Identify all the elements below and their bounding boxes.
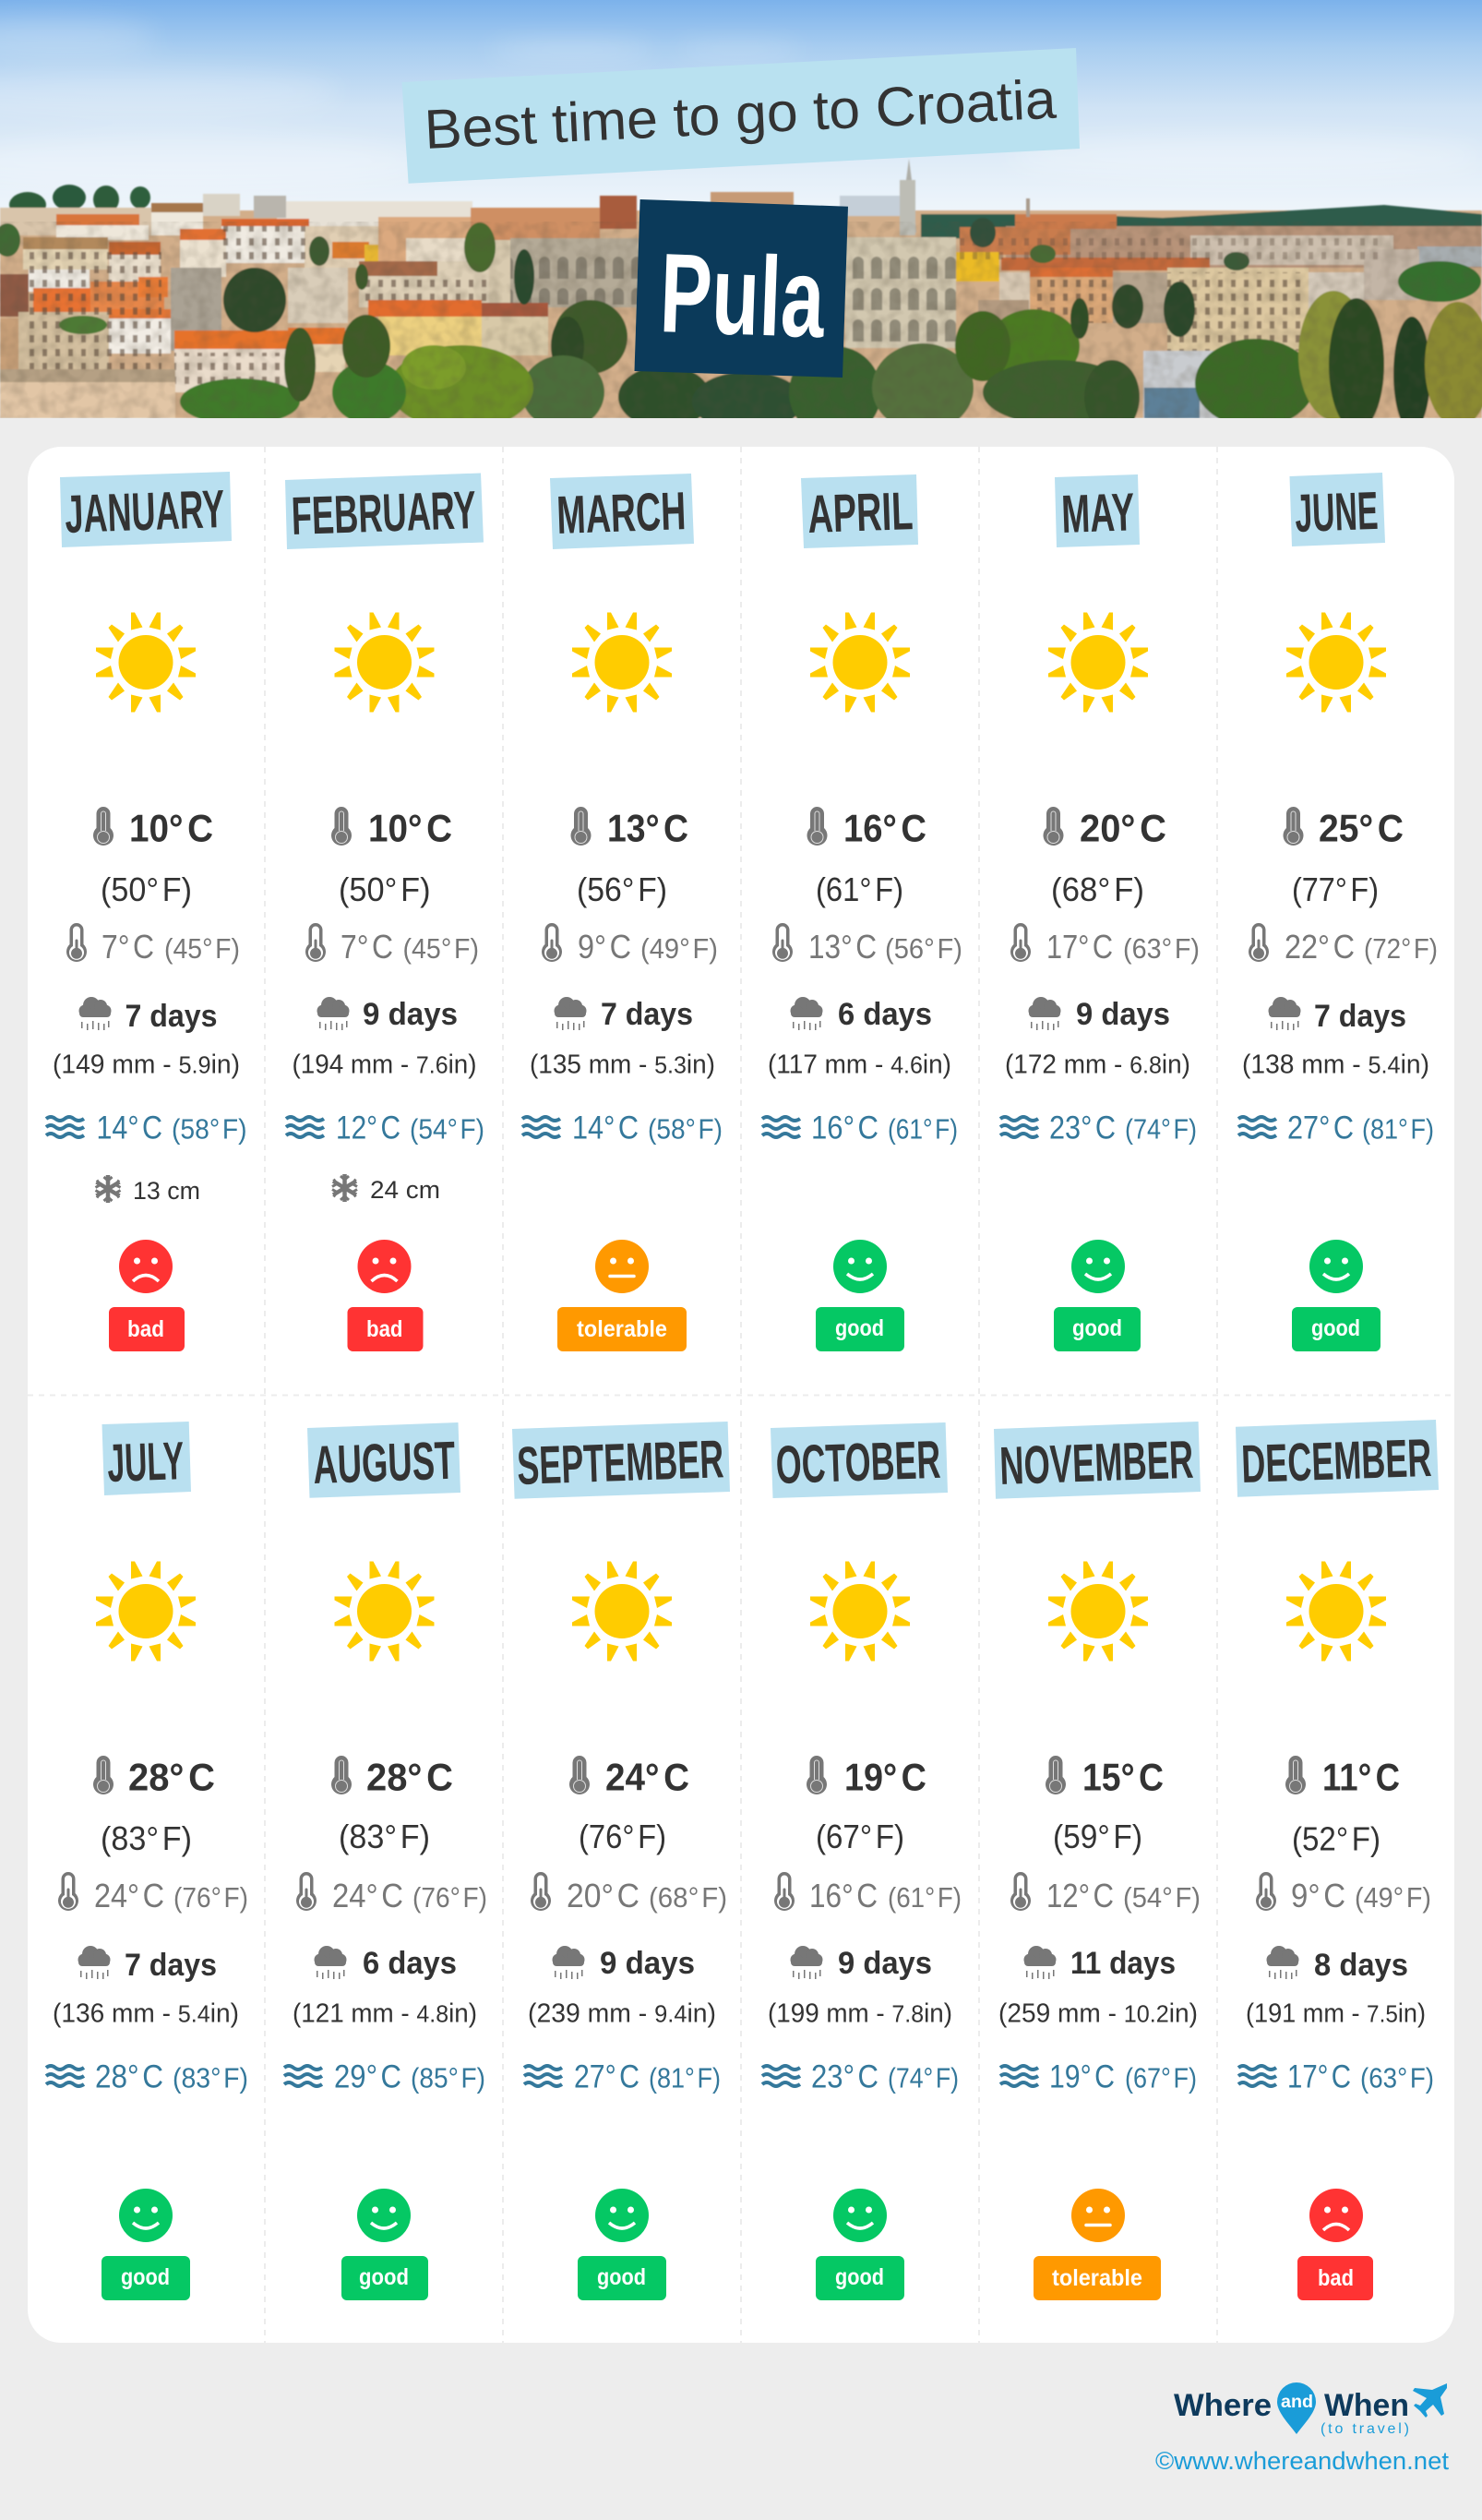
- rainy days: 11 days: [1070, 1946, 1176, 1981]
- logo: Where and When (to travel): Where: [1174, 2388, 1272, 2423]
- sea temperature: [1000, 2058, 1197, 2095]
- average temperature: 16°C: [843, 807, 926, 849]
- icon: sun: [1048, 1562, 1148, 1662]
- column: January: [46, 472, 247, 1351]
- month label: April: [801, 474, 918, 548]
- average temperature in Fahrenheit: (76°F): [579, 1818, 666, 1855]
- column: May: [1000, 474, 1200, 1351]
- rainfall: (149 mm - 5.9in): [53, 1050, 240, 1080]
- low temperature: (68°F): [649, 1881, 727, 1914]
- low temperature: (61°F): [888, 1881, 962, 1914]
- month label: July: JULY: [106, 1431, 185, 1494]
- rating face: bad: [1309, 2189, 1363, 2242]
- low temperature: 16°C: [809, 1877, 878, 1914]
- sea temperature: (67°F): [1125, 2062, 1197, 2094]
- average temperature in Fahrenheit: (52°F): [1292, 1820, 1380, 1857]
- rainfall: (135 mm - 5.3in): [530, 1050, 715, 1080]
- rating badge: good: good: [1311, 1315, 1360, 1341]
- rainy days: [554, 997, 693, 1032]
- sea temperature: (58°F): [648, 1113, 723, 1145]
- rainfall: (199 mm - 7.8in): [768, 1999, 952, 2029]
- rainy days: [78, 1946, 217, 1983]
- rainy days: 9 days: [363, 997, 458, 1032]
- rating badge: good: good: [835, 2264, 884, 2290]
- sea temperature: 27°C: [1287, 1110, 1354, 1146]
- rating badge: good: [1292, 1307, 1380, 1351]
- low temperature: [542, 923, 718, 966]
- column: November: [994, 1422, 1201, 2300]
- sea temperature: 14°C: [572, 1110, 639, 1146]
- rating face: good: [1071, 1240, 1125, 1293]
- month label: October: [771, 1422, 948, 1498]
- logo: Where and When (to travel): (to travel): [1321, 2421, 1409, 2437]
- month label: February: FEBRUARY: [291, 480, 477, 546]
- low temperature: 22°C: [1285, 928, 1355, 966]
- icon: sun: [572, 613, 672, 713]
- month label: July: [102, 1422, 191, 1495]
- average temperature in Fahrenheit: (50°F): [339, 870, 430, 908]
- sea temperature: 29°C: [334, 2058, 401, 2095]
- average temperature: 10°C: [368, 807, 452, 849]
- sea temperature: [1000, 1110, 1197, 1146]
- rating badge: good: good: [1072, 1315, 1122, 1341]
- rainy days: 9 days: [838, 1946, 932, 1981]
- low temperature: [305, 923, 479, 966]
- month label: June: JUNE: [1294, 481, 1379, 544]
- average temperature: [1283, 807, 1404, 849]
- low temperature: 9°C: [578, 928, 631, 966]
- icon: airplane: [1413, 2383, 1447, 2418]
- sea temperature: [762, 2058, 959, 2095]
- rainy days: [790, 1946, 932, 1981]
- rating badge: tolerable: tolerable: [1052, 2265, 1142, 2291]
- rating badge: good: good: [121, 2264, 170, 2290]
- low temperature: 24°C: [332, 1877, 403, 1914]
- title banner: Best time to go to Croatia: Best time to go to Croatia: [423, 68, 1058, 161]
- average temperature in Fahrenheit: (67°F): [816, 1818, 904, 1855]
- rating badge: good: [816, 2256, 904, 2300]
- icon: sun: [810, 1562, 910, 1662]
- column: July: [46, 1422, 248, 2300]
- month label: January: [60, 472, 232, 547]
- rainy days: 6 days: [363, 1946, 457, 1981]
- rainy days: [1028, 997, 1170, 1032]
- average temperature in Fahrenheit: (83°F): [101, 1819, 192, 1857]
- rating badge: good: [102, 2256, 190, 2300]
- low temperature: (54°F): [1123, 1881, 1201, 1914]
- rainy days: 9 days: [1076, 997, 1170, 1032]
- logo: Where and When (to travel): When: [1324, 2388, 1409, 2423]
- month label: March: MARCH: [556, 481, 687, 546]
- rating badge: good: [816, 1307, 904, 1351]
- average temperature: [1046, 1756, 1164, 1798]
- low temperature: 13°C: [808, 928, 877, 966]
- low temperature: (76°F): [173, 1881, 248, 1914]
- sea temperature: [522, 1110, 723, 1146]
- low temperature: 7°C: [341, 928, 393, 966]
- sea temperature: [286, 1110, 484, 1146]
- rainfall: (121 mm - 4.8in): [293, 1999, 477, 2029]
- rainy days: [1266, 1946, 1408, 1983]
- month label: February: [285, 473, 484, 549]
- rainfall: (136 mm - 5.4in): [53, 1999, 239, 2029]
- low temperature: [1010, 1872, 1201, 1914]
- rating face: good: [833, 2189, 887, 2242]
- low temperature: 12°C: [1046, 1877, 1114, 1914]
- sea temperature: (74°F): [1125, 1113, 1197, 1145]
- sea temperature: [524, 2058, 721, 2095]
- rating face: good: [833, 1240, 887, 1293]
- average temperature: [807, 807, 926, 849]
- copyright url: ©www.whereandwhen.net: [1155, 2447, 1449, 2475]
- icon: sun: [1286, 613, 1386, 713]
- rating badge: good: good: [597, 2264, 646, 2290]
- month label: April: APRIL: [807, 481, 914, 545]
- low temperature: 7°C: [102, 928, 154, 966]
- low temperature: [531, 1872, 727, 1914]
- rainy days: 7 days: [125, 1948, 217, 1983]
- average temperature: 13°C: [607, 807, 688, 849]
- sea temperature: (63°F): [1360, 2062, 1434, 2094]
- sea temperature: (58°F): [172, 1113, 247, 1145]
- snowfall: 13 cm: [133, 1177, 200, 1205]
- rating badge: bad: bad: [1318, 2265, 1354, 2291]
- month label: November: NOVEMBER: [998, 1430, 1194, 1496]
- sea temperature: [284, 2058, 485, 2095]
- sea temperature: 23°C: [811, 2058, 878, 2095]
- average temperature: 19°C: [844, 1756, 926, 1798]
- rating face: good: [119, 2189, 173, 2242]
- low temperature: 17°C: [1046, 928, 1113, 966]
- icon: sun: [810, 613, 910, 713]
- sea temperature: 14°C: [96, 1110, 162, 1146]
- rainy days: [317, 997, 458, 1032]
- rating badge: bad: [347, 1307, 423, 1351]
- low temperature: 24°C: [94, 1877, 164, 1914]
- rainfall: (239 mm - 9.4in): [528, 1999, 716, 2029]
- low temperature: (76°F): [412, 1881, 487, 1914]
- month label: March: [550, 474, 694, 549]
- low temperature: [296, 1872, 487, 1914]
- rainfall: (138 mm - 5.4in): [1242, 1050, 1429, 1080]
- sea temperature: (83°F): [173, 2062, 248, 2094]
- low temperature: [774, 1872, 962, 1914]
- rating badge: bad: bad: [366, 1316, 402, 1342]
- rainfall: (117 mm - 4.6in): [768, 1050, 951, 1080]
- rainy days: 7 days: [125, 999, 218, 1034]
- rainfall: (172 mm - 6.8in): [1005, 1050, 1190, 1080]
- low temperature: (45°F): [164, 932, 240, 965]
- icon: sun: [334, 613, 434, 713]
- month label: September: SEPTEMBER: [516, 1429, 724, 1496]
- panel: monthly weather table: [28, 447, 1454, 2343]
- rating badge: good: [1054, 1307, 1141, 1351]
- snowfall: [96, 1175, 200, 1205]
- rating badge: bad: [109, 1307, 185, 1351]
- average temperature: 28°C: [366, 1756, 453, 1798]
- rainy days: 7 days: [601, 997, 693, 1032]
- sea temperature: [1238, 1110, 1434, 1146]
- rainy days: [790, 997, 932, 1032]
- average temperature: [1285, 1756, 1400, 1798]
- average temperature: 15°C: [1082, 1756, 1164, 1798]
- rating face: good: [357, 2189, 411, 2242]
- month label: August: AUGUST: [312, 1431, 456, 1495]
- month label: November: [994, 1422, 1201, 1499]
- icon: sun: [96, 613, 196, 713]
- sea temperature: 23°C: [1049, 1110, 1116, 1146]
- column: October: [762, 1422, 962, 2300]
- average temperature in Fahrenheit: (68°F): [1051, 870, 1144, 908]
- month label: May: [1055, 474, 1140, 547]
- icon: sun: [334, 1562, 434, 1662]
- rating badge: good: good: [359, 2264, 409, 2290]
- rainfall: (194 mm - 7.6in): [292, 1050, 476, 1080]
- rating badge: tolerable: tolerable: [577, 1316, 667, 1342]
- rainfall: (259 mm - 10.2in): [998, 1999, 1198, 2029]
- sea temperature: [1238, 2058, 1434, 2095]
- average temperature: 25°C: [1319, 807, 1404, 849]
- rating face: good: [595, 2189, 649, 2242]
- low temperature: [772, 923, 962, 966]
- city banner: Pula: [635, 199, 848, 378]
- sea temperature: (85°F): [411, 2062, 485, 2094]
- average temperature: 11°C: [1322, 1756, 1400, 1798]
- rainy days: [1024, 1946, 1176, 1981]
- average temperature: 10°C: [129, 807, 213, 849]
- sea temperature: 17°C: [1287, 2058, 1351, 2095]
- rating face: bad: [358, 1240, 412, 1293]
- rainy days: [79, 997, 218, 1034]
- rating badge: good: good: [835, 1315, 884, 1341]
- rating face: bad: [119, 1240, 173, 1293]
- rating badge: good: [341, 2256, 428, 2300]
- sea temperature: 27°C: [574, 2058, 639, 2095]
- rating badge: tolerable: [1034, 2256, 1161, 2300]
- title banner: Best time to go to Croatia: [402, 48, 1080, 184]
- average temperature: [570, 807, 688, 849]
- sea temperature: (61°F): [888, 1113, 958, 1145]
- low temperature: (49°F): [1355, 1881, 1431, 1914]
- average temperature: [1043, 807, 1166, 849]
- low temperature: [1256, 1872, 1431, 1914]
- average temperature: [93, 807, 213, 849]
- sea temperature: [46, 1110, 247, 1146]
- sea temperature: [46, 2058, 248, 2095]
- month label: September: [512, 1422, 730, 1499]
- rainy days: [552, 1946, 695, 1981]
- average temperature: [807, 1756, 926, 1798]
- rating badge: bad: [1297, 2256, 1373, 2300]
- header photo: Pula skyline: [0, 0, 1482, 438]
- sea temperature: 28°C: [95, 2058, 163, 2095]
- sea temperature: (74°F): [888, 2062, 959, 2094]
- icon: sun: [1286, 1562, 1386, 1662]
- low temperature: [1010, 923, 1200, 966]
- average temperature: 28°C: [128, 1756, 215, 1798]
- average temperature: 20°C: [1080, 807, 1166, 849]
- average temperature in Fahrenheit: (56°F): [577, 870, 667, 908]
- rainy days: [1268, 997, 1406, 1034]
- month label: June: [1290, 473, 1385, 546]
- month label: October: OCTOBER: [775, 1430, 941, 1495]
- rating badge: bad: bad: [127, 1316, 164, 1342]
- low temperature: [58, 1872, 248, 1914]
- rating face: good: [1309, 1240, 1363, 1293]
- column: March: [522, 474, 723, 1351]
- icon: sun: [572, 1562, 672, 1662]
- low temperature: (56°F): [885, 932, 962, 965]
- rating face: tolerable: [1071, 2189, 1125, 2242]
- sea temperature: [762, 1110, 958, 1146]
- logo: Where and When (to travel): [1174, 2382, 1447, 2437]
- average temperature: 24°C: [605, 1756, 689, 1798]
- low temperature: (49°F): [640, 932, 718, 965]
- low temperature: (63°F): [1123, 932, 1200, 965]
- column: December: [1236, 1420, 1439, 2300]
- column: February: [285, 473, 484, 1351]
- rainy days: 8 days: [1314, 1948, 1408, 1983]
- month label: January: JANUARY: [64, 479, 225, 545]
- low temperature: [1249, 923, 1438, 966]
- rainy days: 6 days: [838, 997, 932, 1032]
- column: September: [512, 1422, 730, 2300]
- average temperature in Fahrenheit: (50°F): [101, 870, 192, 908]
- snowfall: 24 cm: [370, 1176, 440, 1204]
- icon: map pin: [1277, 2382, 1316, 2434]
- low temperature: 9°C: [1291, 1877, 1345, 1914]
- sea temperature: (81°F): [1362, 1113, 1434, 1145]
- rating badge: good: [578, 2256, 666, 2300]
- sea temperature: (81°F): [649, 2062, 721, 2094]
- rainy days: 9 days: [600, 1946, 695, 1981]
- sea temperature: 19°C: [1049, 2058, 1115, 2095]
- average temperature in Fahrenheit: (61°F): [816, 870, 903, 908]
- low temperature: 20°C: [567, 1877, 639, 1914]
- logo: Where and When (to travel): and: [1281, 2393, 1313, 2412]
- sea temperature: 12°C: [336, 1110, 400, 1146]
- average temperature in Fahrenheit: (59°F): [1053, 1818, 1142, 1855]
- rainfall: (191 mm - 7.5in): [1246, 1999, 1426, 2029]
- average temperature: [569, 1756, 689, 1798]
- column: April: [762, 474, 962, 1351]
- sea temperature: 16°C: [811, 1110, 878, 1146]
- icon: sun: [1048, 613, 1148, 713]
- rating face: tolerable: [595, 1240, 649, 1293]
- column: August: [284, 1422, 487, 2300]
- average temperature in Fahrenheit: (77°F): [1292, 870, 1379, 908]
- sea temperature: (54°F): [410, 1113, 484, 1145]
- icon: sun: [96, 1562, 196, 1662]
- low temperature: (72°F): [1364, 932, 1438, 965]
- average temperature: [331, 807, 452, 849]
- low temperature: [66, 923, 240, 966]
- low temperature: (45°F): [402, 932, 479, 965]
- city banner: Pula: Pula: [658, 230, 828, 361]
- rating badge: tolerable: [557, 1307, 687, 1351]
- snowfall: [332, 1174, 440, 1204]
- month label: August: [307, 1422, 460, 1498]
- average temperature in Fahrenheit: (83°F): [339, 1818, 430, 1855]
- rainy days: [314, 1946, 457, 1981]
- column: June: [1238, 473, 1438, 1351]
- month label: May: MAY: [1060, 482, 1135, 545]
- rainy days: 7 days: [1314, 999, 1406, 1034]
